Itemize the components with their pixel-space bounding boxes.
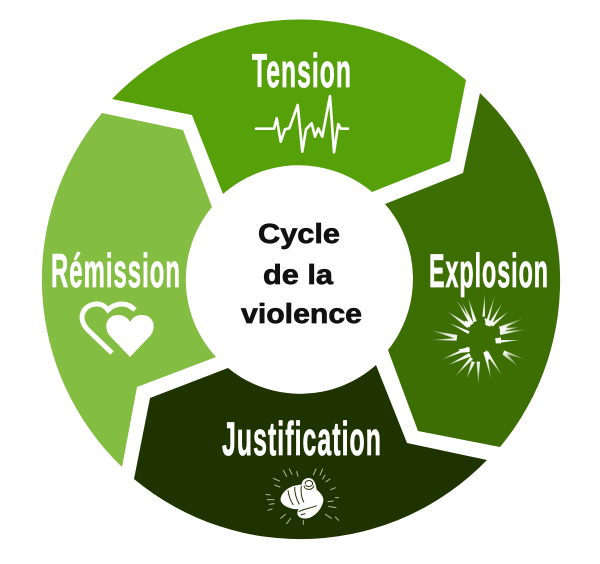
center title — [241, 218, 362, 329]
icon: burst — [430, 293, 527, 385]
panel: Justification — [134, 365, 487, 539]
center title: Cycle — [258, 218, 340, 249]
center title: violence — [241, 298, 362, 329]
center title: de la — [263, 259, 333, 290]
icon: two hearts — [82, 304, 154, 357]
panel: Tension — [112, 19, 466, 194]
heading: Justification: Justification — [222, 412, 382, 465]
heading: Tension: Tension — [252, 44, 352, 97]
icon: heartbeat line — [256, 96, 348, 152]
heading: Rémission: Rémission — [51, 244, 181, 297]
panel: Rémission — [42, 113, 216, 467]
icon: pointing hand — [266, 469, 339, 524]
panel: Explosion — [385, 93, 560, 447]
